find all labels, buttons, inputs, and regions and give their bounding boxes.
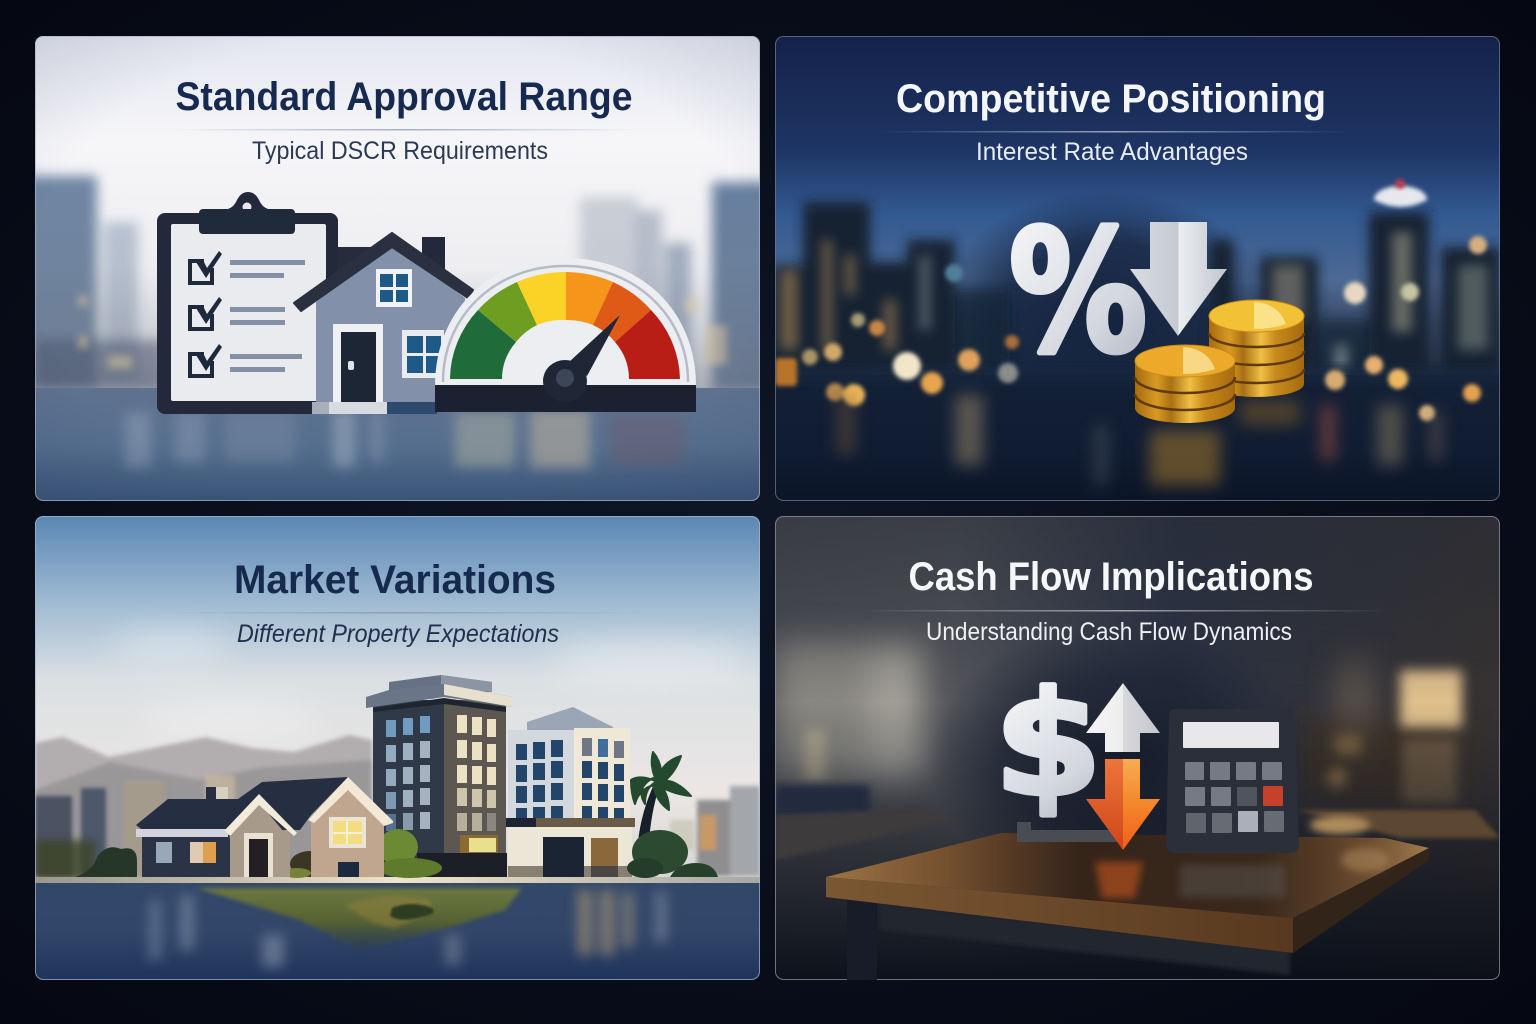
down arrow — [1086, 759, 1160, 850]
subheading: understanding cash flow dynamics: Understanding Cash Flow Dynamics — [926, 618, 1292, 646]
icon: percent and down arrow: % — [1009, 194, 1147, 390]
icon: clipboard checklist — [157, 192, 338, 414]
illustration: property skyline — [75, 675, 718, 878]
icon: calculator — [1166, 709, 1299, 853]
up arrow — [1086, 683, 1160, 752]
front coin stack — [1135, 345, 1235, 423]
back coin stack — [1209, 300, 1304, 397]
subheading: typical DSCR requirements: Typical DSCR Requirements — [252, 137, 548, 165]
subheading: interest rate advantages: Interest Rate Advantages — [976, 138, 1248, 166]
panel: market variations — [35, 516, 760, 980]
shrubs — [75, 829, 718, 878]
icon: DSCR gauge — [435, 258, 696, 412]
panel: competitive positioning — [770, 36, 1501, 501]
houses — [136, 777, 393, 877]
icon: dollar sign and arrows — [994, 660, 1160, 850]
panel: cash flow implications — [775, 516, 1500, 980]
white office building — [506, 707, 635, 877]
heading: standard approval range: Standard Approval Range — [176, 75, 632, 119]
wooden table — [826, 833, 1429, 980]
subheading: different property expectations: Different Property Expectations — [237, 620, 559, 648]
panel: standard approval range — [25, 36, 772, 501]
icon: dollar sign and arrows: $ — [994, 660, 1102, 828]
gauge needle — [543, 315, 620, 402]
palm tree — [631, 752, 691, 842]
icon: gold coin stacks — [1135, 300, 1304, 423]
heading: cash flow implications: Cash Flow Implications — [908, 555, 1314, 599]
mid-rise tower — [366, 675, 513, 877]
heading: market variations: Market Variations — [234, 558, 556, 602]
icon: house — [294, 233, 473, 414]
heading: competitive positioning: Competitive Positioning — [896, 77, 1326, 121]
